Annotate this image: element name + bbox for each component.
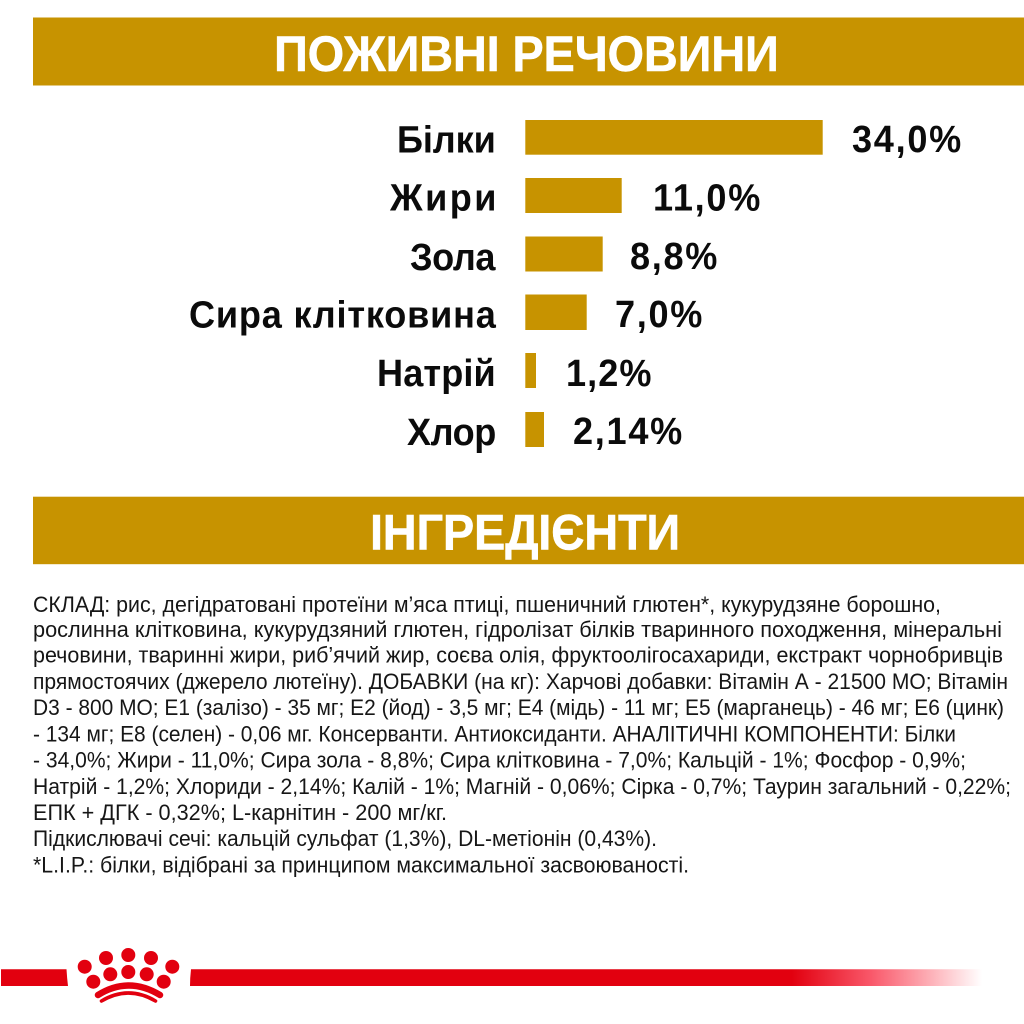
panel: nutrients bar chart [189, 117, 961, 453]
row: sodium: 1,2% [566, 351, 652, 394]
row: crude fibre [189, 292, 702, 336]
row: fats: 11,0% [653, 176, 760, 219]
text block: composition: Підкислювачі сечі: кальцій сульфат (1,3%), DL-метіонін (0,43%). [33, 826, 657, 851]
text block: composition: ЕПК + ДГК - 0,32%; L-карнітин - 200 мг/кг. [33, 800, 447, 825]
row: protein: Білки [397, 118, 496, 161]
heading: nutrients: ПОЖИВНІ РЕЧОВИНИ [274, 27, 779, 82]
row: chlorine [407, 409, 682, 453]
footer strip: left red bar [1, 969, 68, 986]
panel: nutrients heading banner [33, 18, 1024, 86]
row: sodium [377, 351, 652, 394]
footer strip: right red bar fading out [190, 969, 982, 986]
row: ash: 8,8% [630, 234, 717, 277]
row: fats: Жири [389, 176, 496, 219]
row: ash: Зола [410, 235, 496, 278]
row: ash [410, 234, 717, 278]
row: protein: 34,0% [852, 117, 961, 160]
row: chlorine: Хлор [407, 410, 496, 453]
row: protein [397, 117, 961, 161]
text block: composition: - 134 мг; Е8 (селен) - 0,06 мг. Консерванти. Антиоксиданти. АНАЛІТИЧНІ КОМПОНЕНТИ: Білки [33, 722, 956, 746]
text block: composition: речовини, тваринні жири, риб’ячий жир, соєва олія, фруктоолігосахариди, екстракт чорнобривців [33, 642, 1003, 668]
text block: composition: СКЛАД: рис, дегідратовані протеїни м’яса птиці, пшеничний глютен*, кукурудзяне борошно, [33, 592, 941, 617]
heading: ingredients: ІНГРЕДІЄНТИ [370, 505, 680, 561]
row: crude fibre: Сира клітковина [189, 292, 496, 336]
icon: royal crown logo [78, 948, 179, 1001]
row: crude fibre: 7,0% [615, 292, 702, 335]
panel: ingredients heading banner [33, 497, 1024, 564]
text block: composition: рослинна клітковина, кукурудзяний глютен, гідролізат білків тваринного походження, мінеральні [33, 617, 1002, 642]
text block: composition: *L.I.P.: білки, відібрані за принципом максимальної засвоюваності. [33, 853, 689, 878]
row: chlorine: 2,14% [573, 409, 682, 452]
row: sodium: Натрій [377, 351, 496, 394]
text block: composition [33, 592, 1011, 878]
row: fats [389, 176, 760, 219]
text block: composition: - 34,0%; Жири - 11,0%; Сира зола - 8,8%; Сира клітковина - 7,0%; Кальцій - 1%; Фосфор - 0,9%; [33, 748, 966, 773]
